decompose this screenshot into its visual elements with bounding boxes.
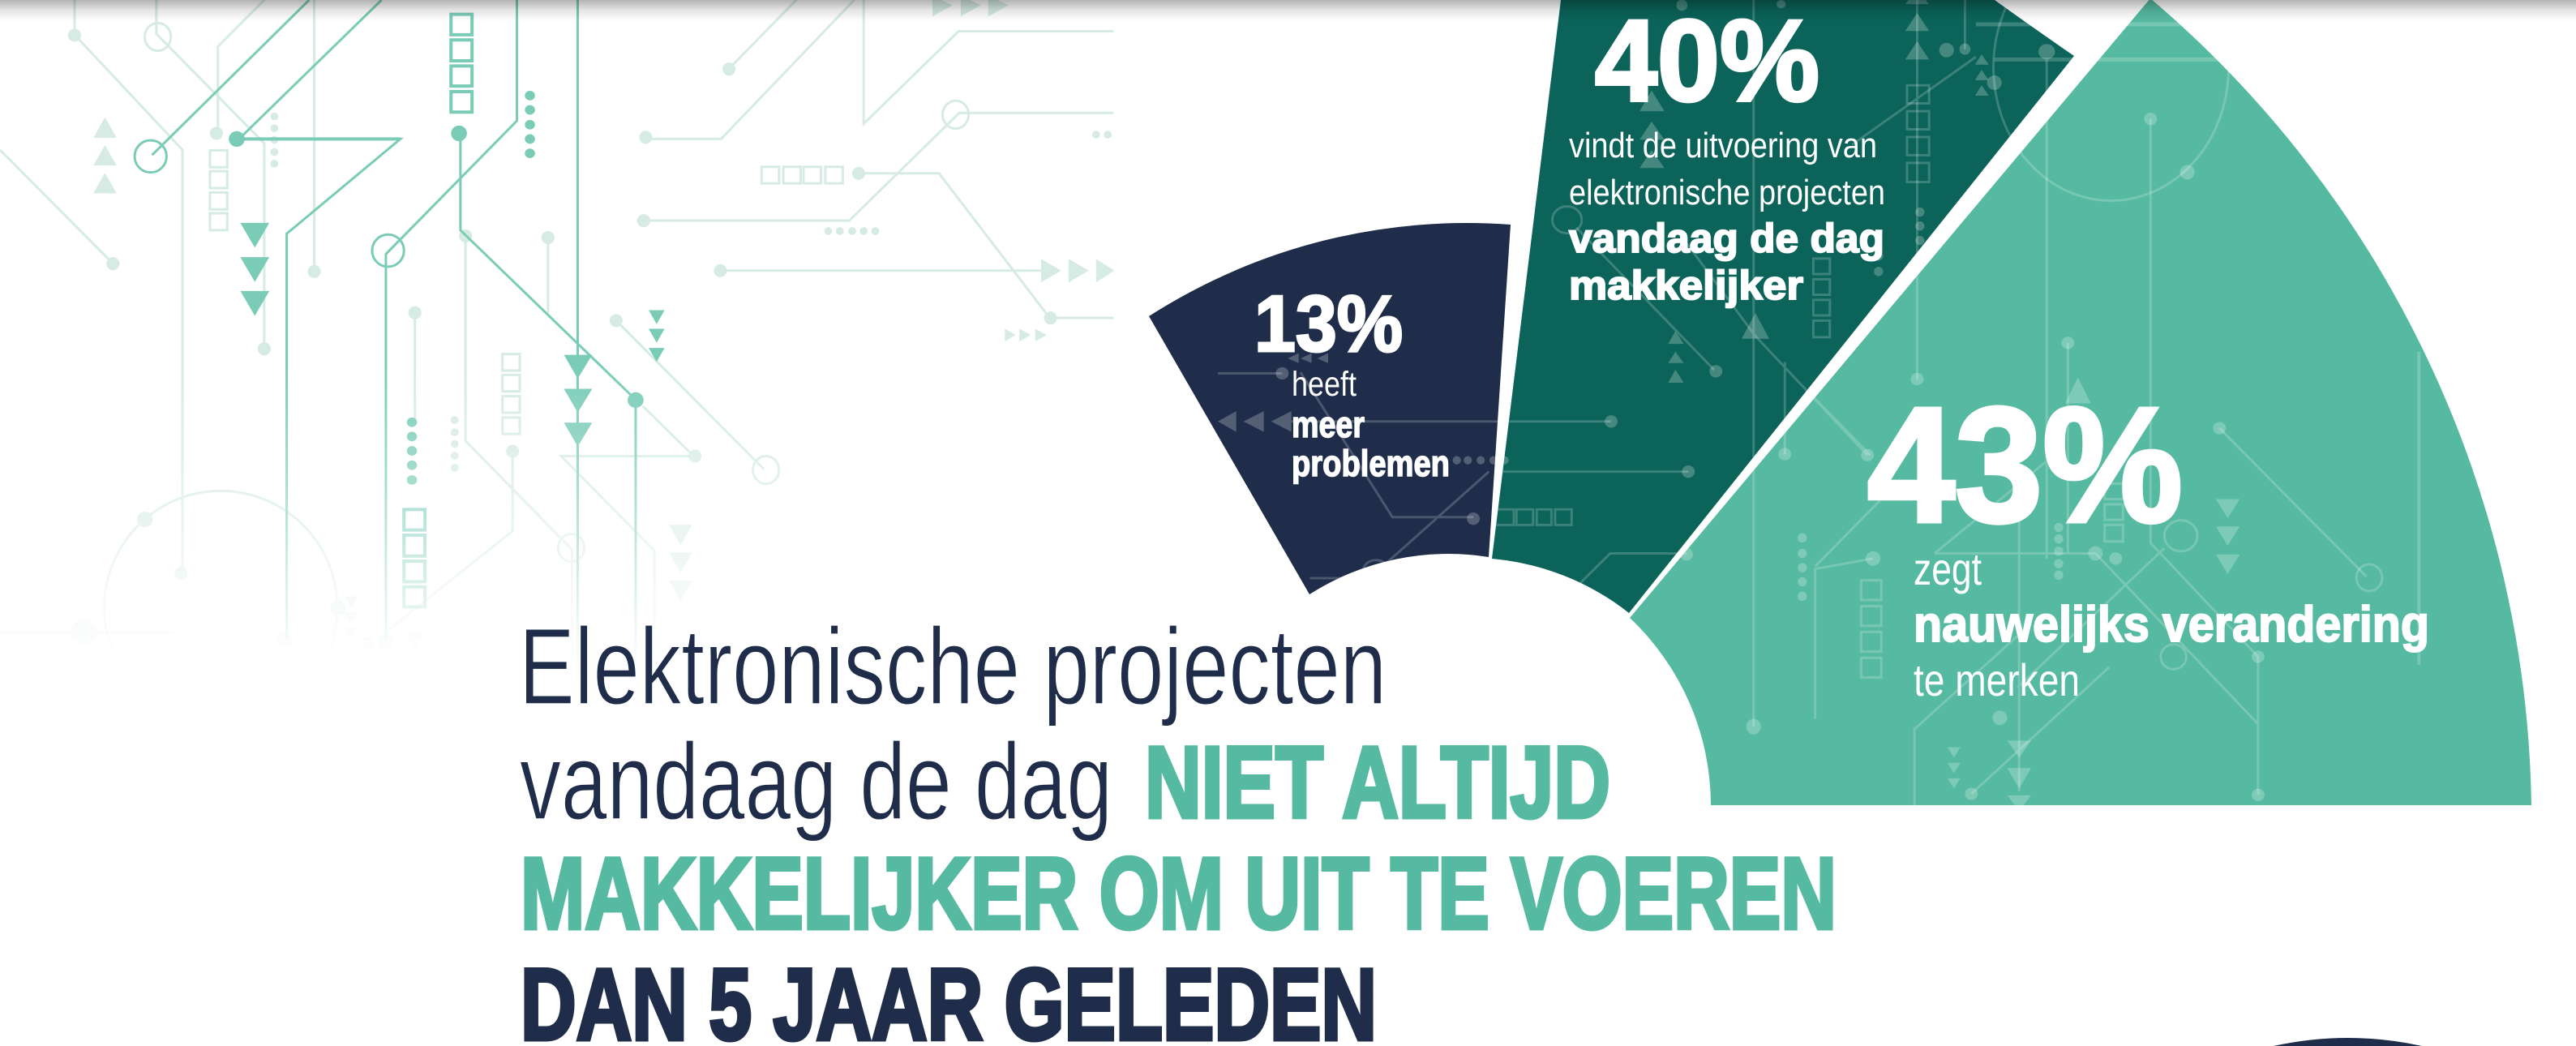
pale circuit traces [0,0,1114,610]
40% statistic text [1569,0,1885,308]
43% figure: 43% [1867,373,2183,556]
navy shape at bottom right [2274,1038,2422,1046]
title: MAKKELIJKER OM UIT TE VOEREN [521,838,1837,950]
40% label: vindt de uitvoering van [1569,126,1877,165]
pie sector: 40% dark green [1492,0,2074,613]
43% label [1914,543,2429,705]
background circuit pattern [0,0,1114,726]
title: NIET ALTIJD [1145,727,1610,839]
40% figure: 40% [1595,0,1819,126]
40% label: elektronische projecten [1569,173,1885,212]
title [519,607,1837,1046]
40% label [1569,126,1885,308]
13% statistic text [1254,279,1450,484]
43% label: nauwelijks verandering [1914,597,2429,653]
13% label: meer [1292,404,1365,445]
title: vandaag de dag [520,722,1112,842]
40% label: vandaag de dag [1569,216,1884,261]
43% label: te merken [1914,654,2080,705]
43% label: zegt [1914,543,1982,594]
pale circuit nodes and arrows [68,0,1114,678]
43% statistic text [1867,373,2429,705]
strong circuit nodes and arrows [229,91,665,485]
pie sector: 43% light green [1630,0,2531,805]
circuit pattern inside pie [1218,0,2419,811]
strong circuit traces [135,0,636,681]
bottom fade of circuit pattern [0,0,1149,681]
13% label: problemen [1292,443,1450,484]
pie sector: 13% navy [1149,223,1511,594]
13% label: heeft [1292,365,1357,404]
40% label: makkelijker [1569,263,1803,308]
title: Elektronische projecten [519,607,1387,727]
top edge shadow [0,0,2576,21]
13% figure: 13% [1254,279,1403,368]
13% label [1292,365,1450,484]
